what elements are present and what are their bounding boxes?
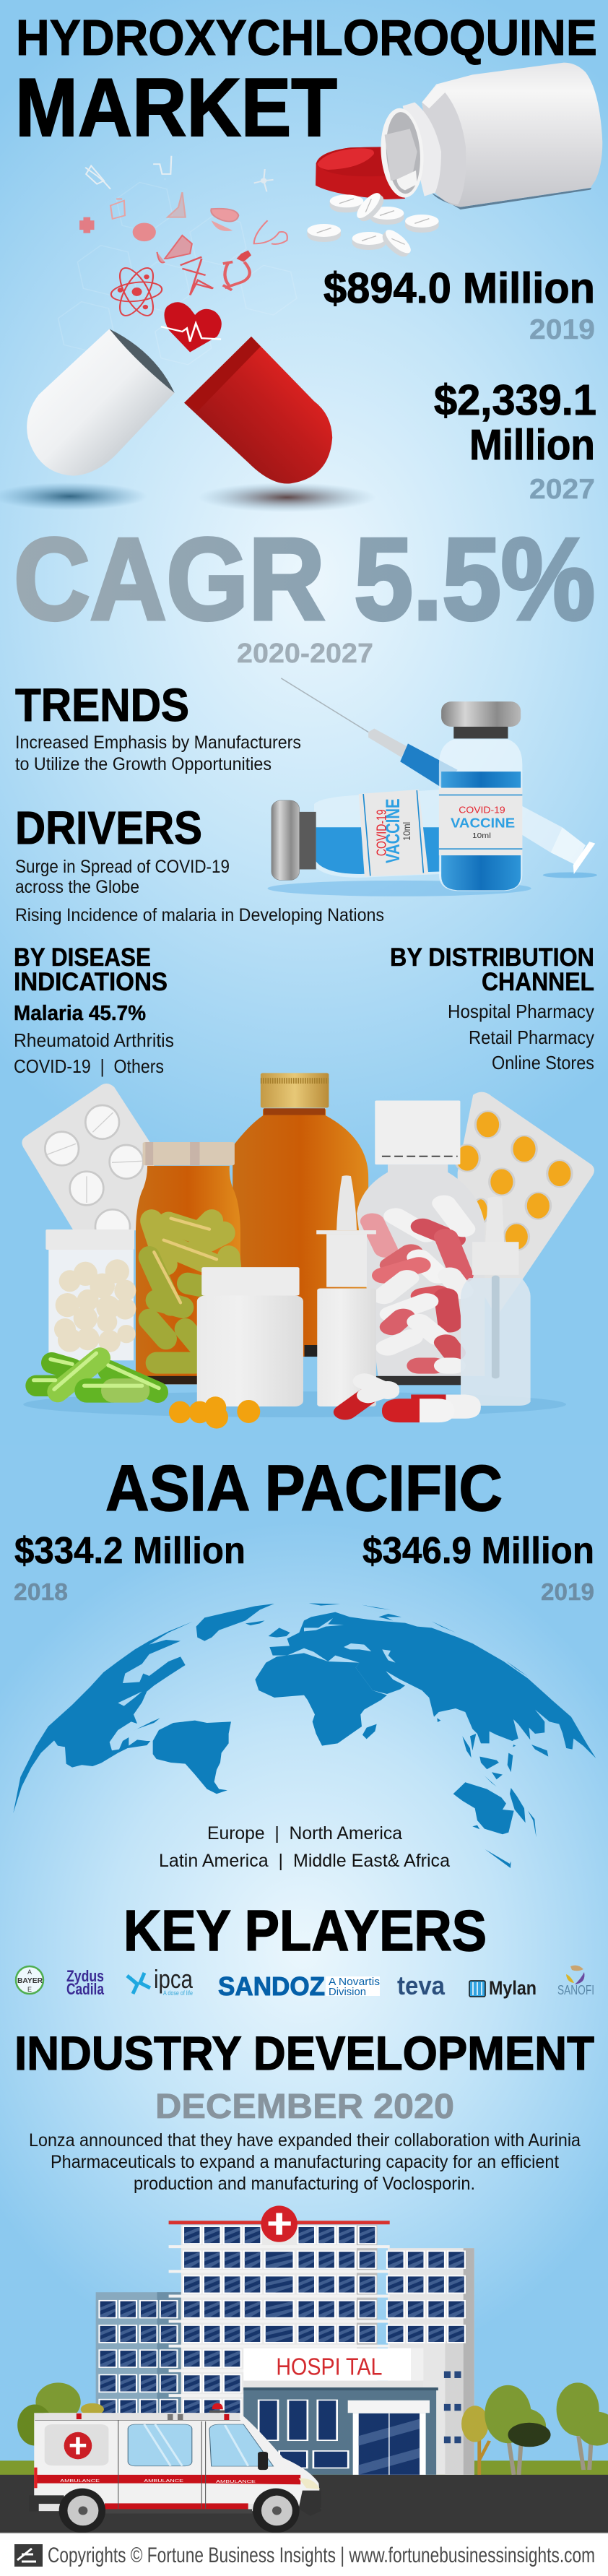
logo: ipca: A dose of life [163, 1989, 193, 1997]
Asia Pacific values [14, 1530, 594, 1605]
by distribution channel: BY DISTRIBUTION [390, 943, 594, 972]
illustration: ambulance: AMBULANCE [144, 2478, 183, 2483]
logo: Bayer: A [27, 1968, 32, 1976]
illustration: ambulance: AMBULANCE [216, 2479, 256, 2484]
value 2019: 2019 [529, 314, 595, 345]
value 2019: $894.0 Million [323, 264, 595, 312]
illustration: syringe and vaccine vials [268, 678, 597, 896]
by disease indications [14, 943, 174, 1077]
development text: Pharmaceuticals to expand a manufacturing capacity for an efficient [51, 2152, 559, 2172]
by distribution channel: Hospital Pharmacy [448, 1000, 594, 1022]
by disease indications: Rheumatoid Arthritis [14, 1029, 174, 1051]
logo: Sandoz [218, 1971, 380, 2001]
logo: Sandoz: SANDOZ [218, 1971, 325, 2001]
heading: Asia Pacific: ASIA PACIFIC [105, 1453, 503, 1525]
Asia Pacific values: $334.2 Million [14, 1530, 246, 1572]
Asia Pacific values: 2019 [541, 1578, 594, 1605]
trends block [15, 679, 301, 774]
logo: Mylan: Mylan [489, 1977, 537, 1999]
by distribution channel: Online Stores [492, 1052, 594, 1073]
value 2027: $2,339.1 [434, 376, 596, 424]
illustration: syringe and vaccine vials: 10ml [472, 833, 491, 840]
development text: production and manufacturing of Voclosporin. [134, 2174, 475, 2194]
icon: heart with pulse line [161, 302, 222, 352]
illustration: syringe and vaccine vials: COVID-19 [374, 809, 388, 856]
world map [13, 1603, 596, 1868]
drivers block [15, 802, 384, 925]
illustration: syringe and vaccine vials: VACCINE [383, 798, 404, 863]
logo: Sanofi: SANOFI [557, 1983, 594, 1997]
illustration: syringe and vaccine vials: COVID-19 [459, 805, 505, 815]
by disease indications: BY DISEASE [14, 943, 151, 972]
logo: Bayer: BAYER [17, 1977, 43, 1985]
illustration: open capsule [0, 329, 376, 512]
illustration: syringe and vaccine vials: 10ml [401, 822, 412, 841]
trends block: TRENDS [15, 679, 189, 731]
by disease indications: Malaria 45.7% [14, 1002, 146, 1025]
by disease indications: INDICATIONS [14, 968, 168, 996]
Asia Pacific values: 2018 [14, 1578, 68, 1605]
by distribution channel: CHANNEL [482, 968, 594, 996]
illustration: ambulance: AMBULANCE [60, 2478, 100, 2483]
trends block: to Utilize the Growth Opportunities [15, 754, 272, 774]
ground and road [0, 2460, 608, 2534]
illustration: faint network of health icons [58, 156, 297, 365]
other regions: Latin America | Middle East& Africa [159, 1851, 450, 1871]
by disease indications: COVID-19 | Others [14, 1055, 164, 1077]
other regions: Europe | North America [207, 1823, 402, 1844]
Asia Pacific values: $346.9 Million [362, 1530, 594, 1572]
by distribution channel: Retail Pharmacy [469, 1026, 594, 1048]
illustration: hospital building [96, 2205, 474, 2475]
heading: Key Players: KEY PLAYERS [123, 1898, 487, 1963]
logo: Bayer [16, 1966, 43, 1994]
value 2027 [434, 376, 596, 505]
logo: Zydus Cadila [66, 1967, 105, 1998]
illustration: trees [17, 2382, 608, 2475]
title: MARKET [15, 62, 337, 154]
illustration: open pill bottle with tablets [307, 63, 602, 260]
trends block: Increased Emphasis by Manufacturers [15, 732, 301, 753]
logo: Zydus Cadila: Cadila [66, 1980, 105, 1998]
logo: Sandoz: Division [329, 1986, 366, 1998]
logo: Zydus Cadila: Zydus [66, 1967, 104, 1985]
date heading: DECEMBER 2020 [155, 2088, 454, 2126]
development text [29, 2130, 581, 2194]
logo: Bayer: E [27, 1986, 32, 1993]
title [15, 9, 597, 154]
drivers block: Surge in Spread of COVID-19 [15, 857, 230, 877]
value 2019 [323, 264, 595, 345]
by distribution channel [390, 943, 594, 1073]
drivers block: across the Globe [15, 877, 139, 897]
logo: ipca [127, 1964, 194, 1997]
development text: Lonza announced that they have expanded their collaboration with Aurinia [29, 2130, 581, 2151]
logo: Sandoz: A Novartis [329, 1976, 380, 1988]
value 2027: Million [469, 421, 595, 469]
illustration: ambulance [29, 2403, 321, 2533]
logo: ipca: ipca [154, 1964, 194, 1994]
drivers block: Rising Incidence of malaria in Developing Nations [15, 905, 384, 925]
illustration: hospital building: HOSPI TAL [276, 2354, 382, 2380]
value 2027: 2027 [529, 474, 595, 505]
drivers block: DRIVERS [15, 802, 202, 854]
logo: Mylan [469, 1977, 537, 1999]
logo: Teva: teva [397, 1971, 446, 2000]
other regions [159, 1823, 450, 1871]
illustration: medicine bottles, blisters and capsules [22, 1073, 594, 1429]
logo: Sanofi [557, 1966, 594, 1997]
illustration: syringe and vaccine vials: VACCINE [451, 816, 515, 831]
footer band [0, 2533, 608, 2576]
CAGR headline: 2020-2027 [237, 639, 373, 669]
